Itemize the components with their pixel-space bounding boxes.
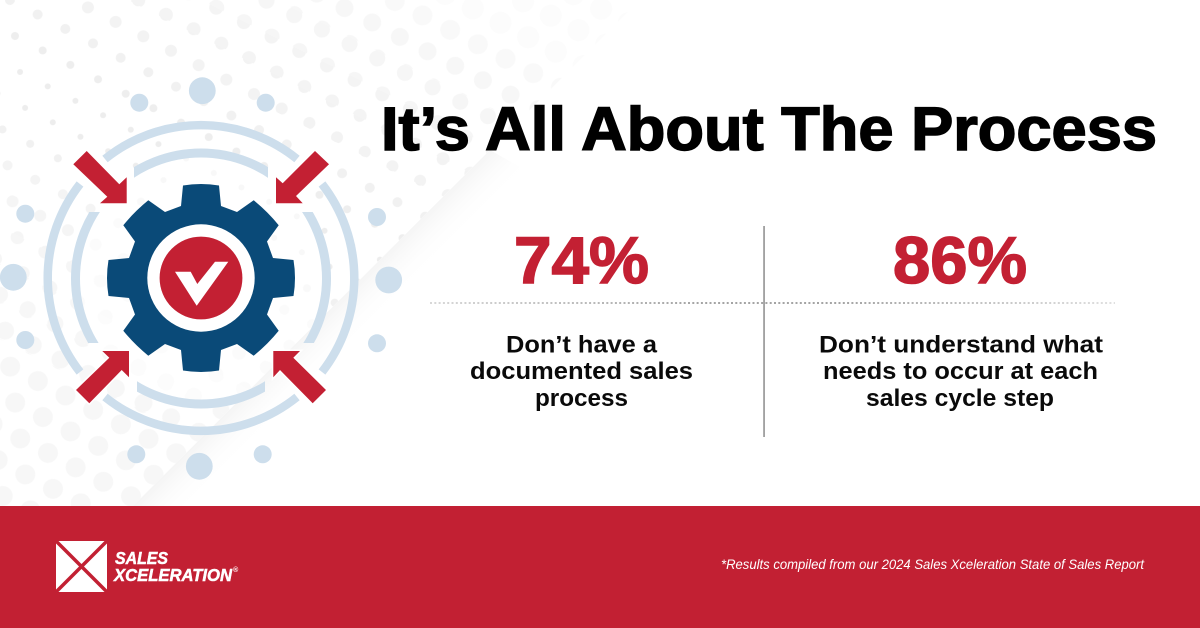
gear xyxy=(107,184,295,372)
stat description right: Don’t understand what xyxy=(819,332,1103,359)
footer band xyxy=(0,506,1200,628)
vertical divider xyxy=(763,226,765,437)
outer ring arcs xyxy=(48,125,354,431)
red check badge xyxy=(160,237,242,319)
logo xyxy=(54,539,239,594)
stat description right xyxy=(819,332,1103,412)
stat: 74%: 74% xyxy=(514,223,649,297)
icon: check mark xyxy=(175,262,228,306)
stat: 86% xyxy=(819,223,1103,412)
logo wordmark xyxy=(113,548,239,585)
background halftone dots and streak xyxy=(0,0,512,506)
inner ring arcs xyxy=(76,153,326,404)
icon: gear with converging arrows xyxy=(0,77,402,480)
stat description left: Don’t have a xyxy=(506,332,657,359)
stat: 86%: 86% xyxy=(893,223,1027,297)
footnote: *Results compiled from our 2024 Sales Xceleration State of Sales Report xyxy=(721,556,1145,572)
stat description left xyxy=(470,332,693,412)
logo mark xyxy=(54,539,109,594)
blue accent dots xyxy=(0,77,402,480)
logo wordmark: ® xyxy=(233,566,239,574)
stat description right: sales cycle step xyxy=(866,385,1054,412)
logo wordmark: SALES xyxy=(115,548,168,568)
stat description right: needs to occur at each xyxy=(823,358,1098,385)
arrows xyxy=(73,151,329,403)
white hub xyxy=(147,224,255,332)
logo wordmark: XCELERATION xyxy=(113,565,232,585)
dotted divider xyxy=(430,302,1115,304)
stat: 74% xyxy=(470,223,693,412)
stat description left: documented sales xyxy=(470,358,693,385)
stat description left: process xyxy=(535,385,628,412)
title: It’s All About The Process xyxy=(381,95,1157,163)
